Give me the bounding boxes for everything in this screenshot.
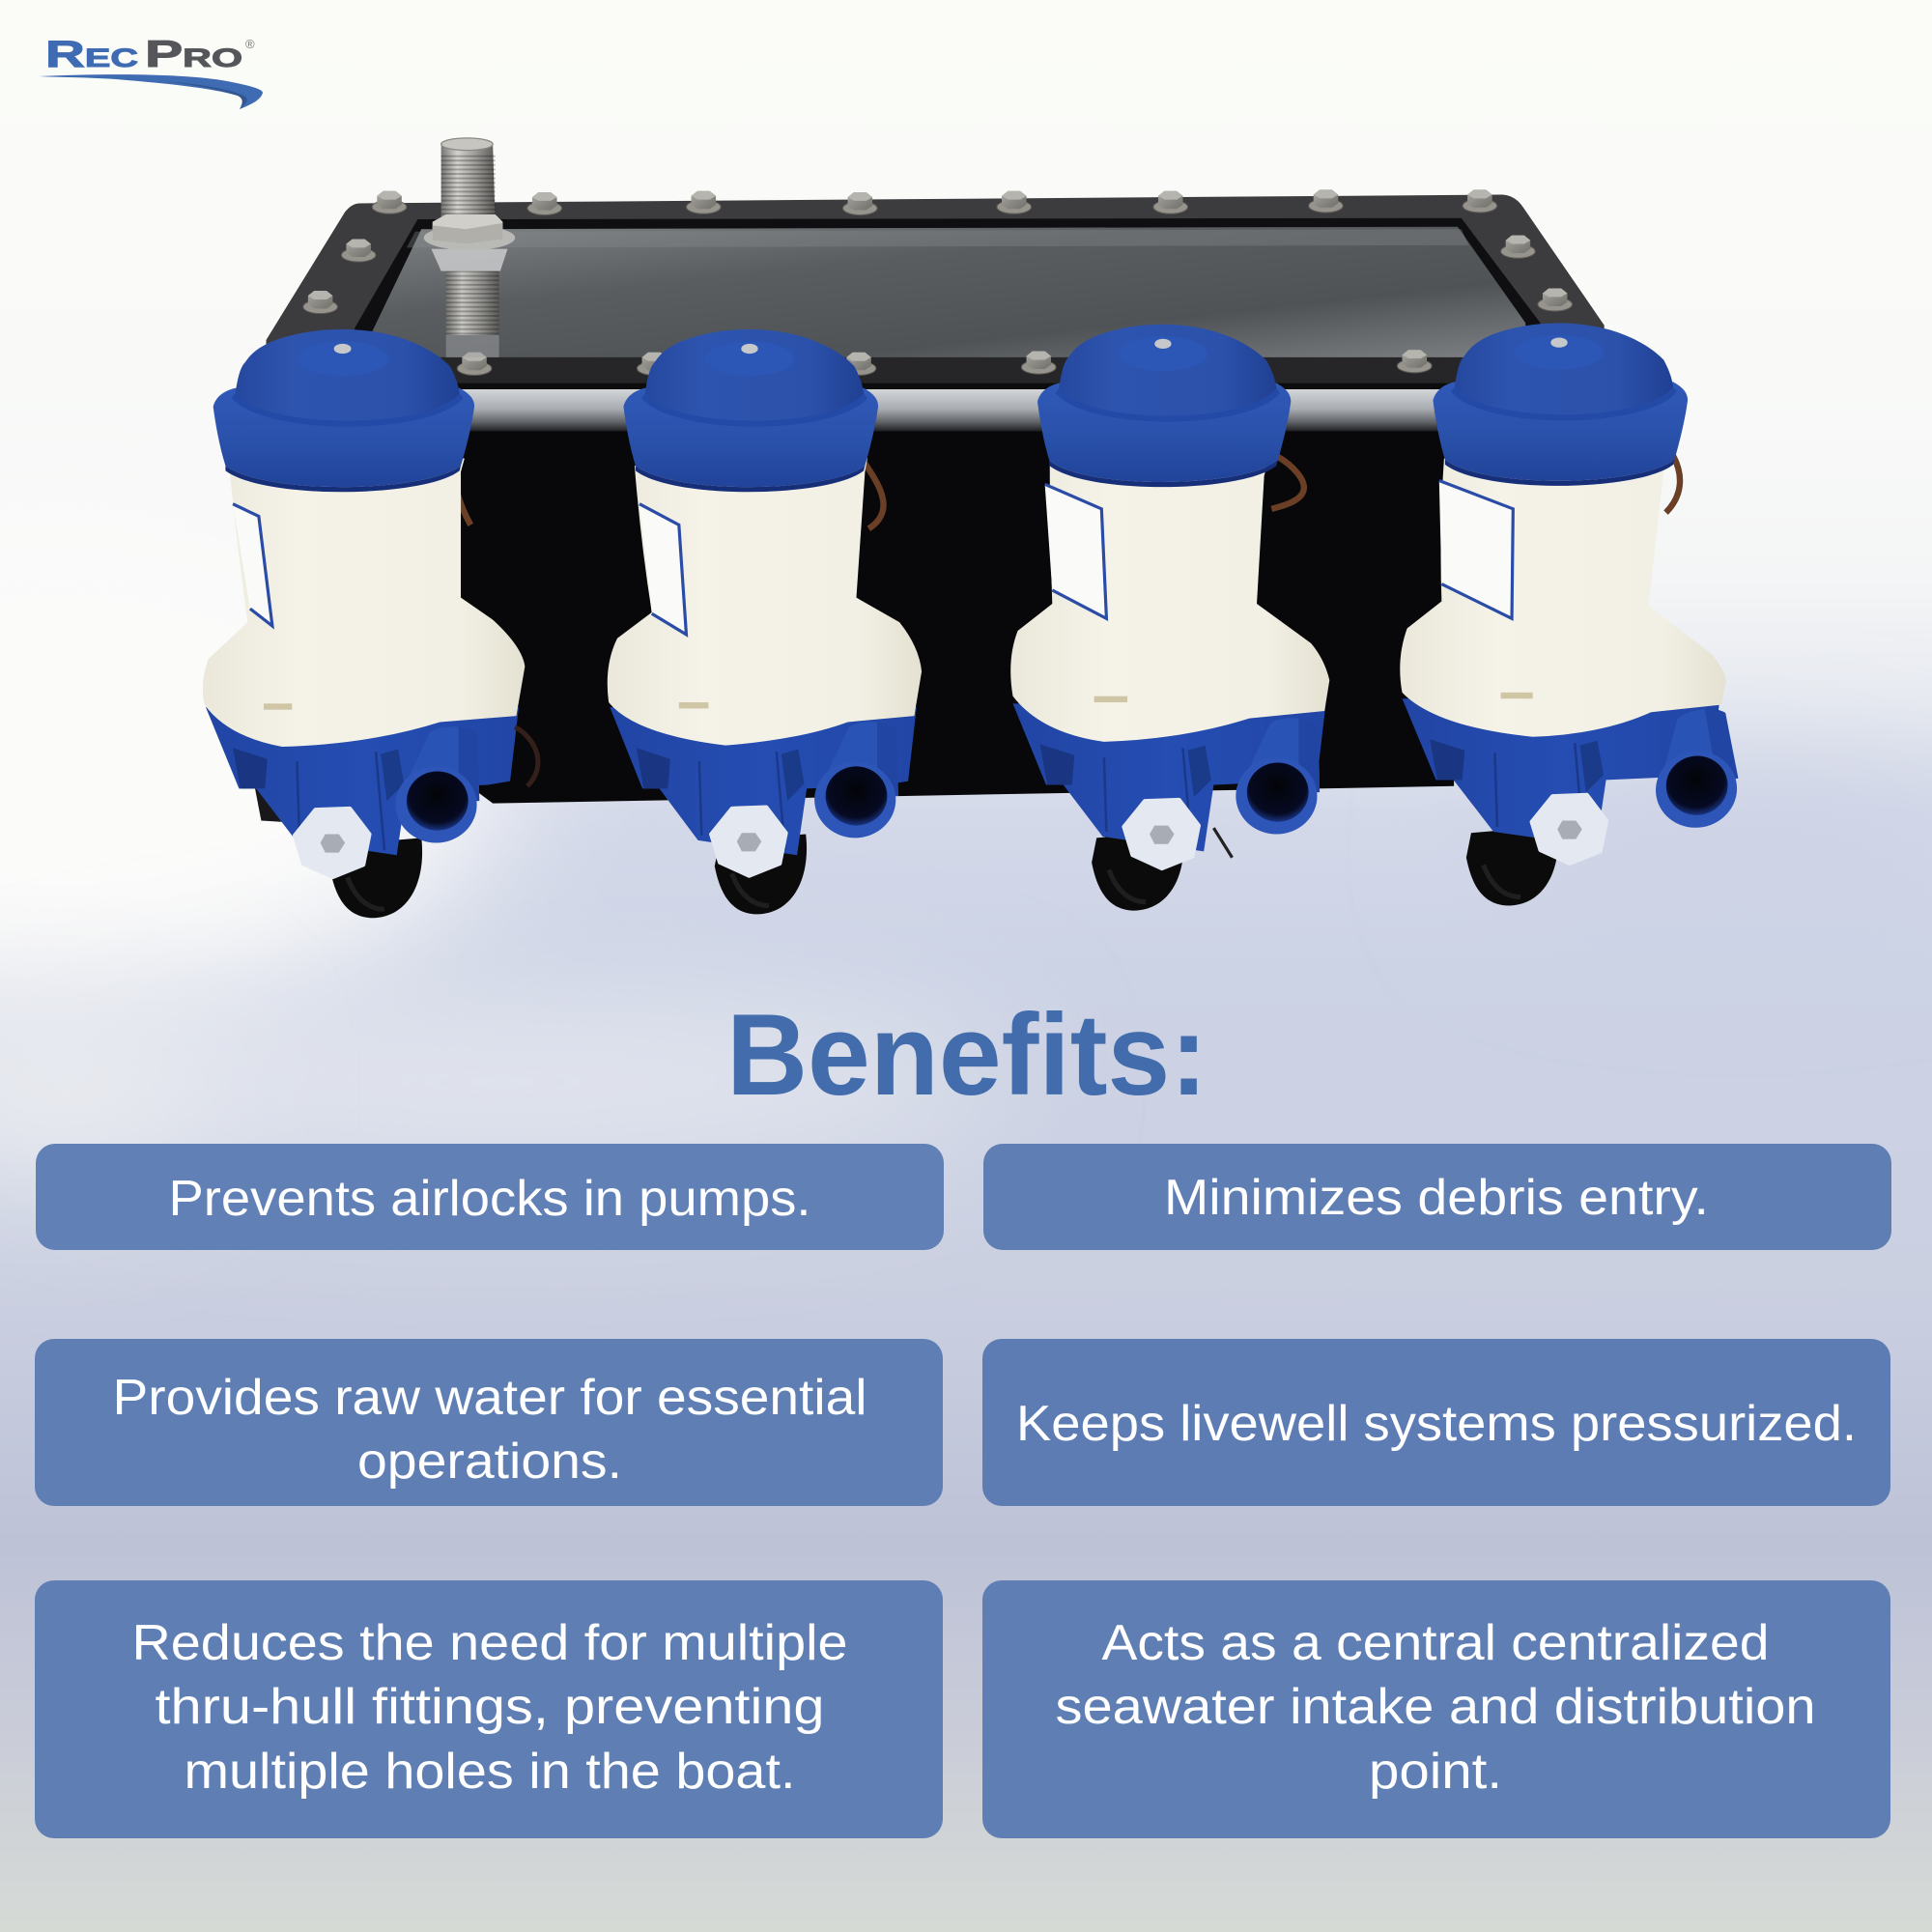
manifold box body xyxy=(255,323,1602,823)
benefit: central intake: seawater intake and distribution xyxy=(1055,1679,1816,1735)
logo: RecPro: Rec xyxy=(45,34,138,75)
benefit: central intake: point. xyxy=(1369,1744,1502,1800)
pump 1 xyxy=(203,329,538,918)
title: Benefits: xyxy=(726,990,1208,1120)
pump 3 xyxy=(1010,325,1329,911)
benefit: raw water: Provides raw water for essential xyxy=(112,1370,867,1426)
logo: RecPro: ® xyxy=(245,37,255,51)
benefit: raw water: operations. xyxy=(357,1434,622,1490)
thru-hull fitting xyxy=(424,138,515,357)
product photo: manifold with pumps xyxy=(203,138,1746,918)
benefit: keeps livewell pressurized xyxy=(982,1339,1890,1506)
benefit: reduces thru-hull fittings xyxy=(35,1580,943,1838)
benefit: keeps livewell pressurized: Keeps livewell systems pressurized. xyxy=(1016,1396,1857,1452)
benefit: reduces thru-hull fittings: Reduces the need for multiple xyxy=(131,1615,848,1671)
benefit: minimizes debris xyxy=(983,1144,1891,1250)
logo: RecPro: Pro xyxy=(145,34,242,75)
flange bolts xyxy=(303,189,1573,375)
benefit: raw water xyxy=(35,1339,943,1506)
pump 4 xyxy=(1400,324,1746,905)
pump 2 xyxy=(608,329,922,914)
glass lid and frame xyxy=(267,195,1605,389)
benefit: minimizes debris: Minimizes debris entry. xyxy=(1164,1170,1709,1226)
benefit: reduces thru-hull fittings: multiple holes in the boat. xyxy=(184,1744,796,1800)
benefit: reduces thru-hull fittings: thru-hull fittings, preventing xyxy=(155,1679,825,1735)
benefit: central intake xyxy=(982,1580,1890,1838)
benefit: prevents airlocks: Prevents airlocks in pumps. xyxy=(168,1171,811,1227)
logo: RecPro xyxy=(39,34,263,109)
benefit: central intake: Acts as a central centralized xyxy=(1101,1615,1770,1671)
benefit: prevents airlocks xyxy=(36,1144,944,1250)
